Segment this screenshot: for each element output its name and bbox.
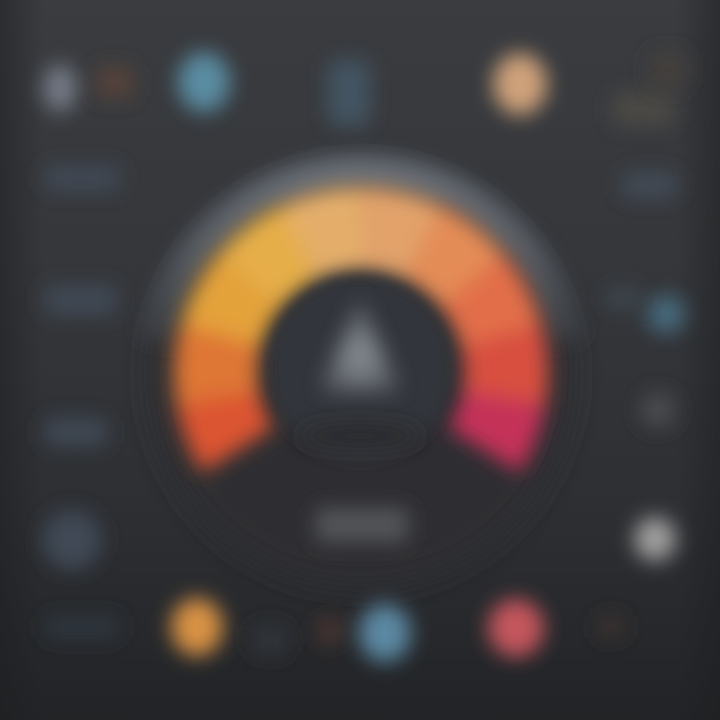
- left label one: [45, 165, 120, 191]
- icon: bottom right small mark: [598, 615, 624, 639]
- icon: right blue dot: [647, 295, 685, 333]
- left label four: [45, 615, 120, 639]
- bottom row icons: [171, 598, 624, 662]
- gauge inner hub: [268, 276, 452, 460]
- icon: top peach dot: [493, 53, 547, 115]
- gauge colour arc: [216, 228, 506, 450]
- gauge dark dial: [149, 163, 573, 587]
- right label two: [606, 288, 642, 308]
- gauge value label: [316, 508, 408, 542]
- left label three: [45, 418, 107, 446]
- left column labels: [42, 165, 120, 639]
- icon: bottom red dot: [488, 599, 544, 657]
- left icon circle: [42, 510, 102, 570]
- icon: bottom blue dot: [359, 604, 411, 662]
- icon: top centre blue mark: [328, 60, 370, 126]
- gauge outer grey ring: [158, 173, 564, 340]
- icon: top left small orange mark: [96, 66, 134, 98]
- bottom centre faint mark: [252, 625, 288, 655]
- icon: top blue dot: [178, 52, 230, 112]
- icon: bottom orange dot: [171, 598, 223, 656]
- gauge lower dial shadow: [300, 424, 420, 448]
- right column items: [606, 172, 685, 561]
- icon: top right brown mark: [612, 92, 674, 126]
- icon: bottom small orange mark: [318, 618, 342, 644]
- icon: top left grey dot: [43, 64, 77, 112]
- icon: right grey dot: [640, 392, 676, 428]
- right label one: [622, 172, 677, 198]
- icon: top right upper mark: [650, 52, 686, 88]
- needle triangle icon: [318, 295, 402, 392]
- left label two: [45, 285, 117, 315]
- icon: right light dot: [634, 517, 676, 561]
- top row icons: [43, 52, 686, 126]
